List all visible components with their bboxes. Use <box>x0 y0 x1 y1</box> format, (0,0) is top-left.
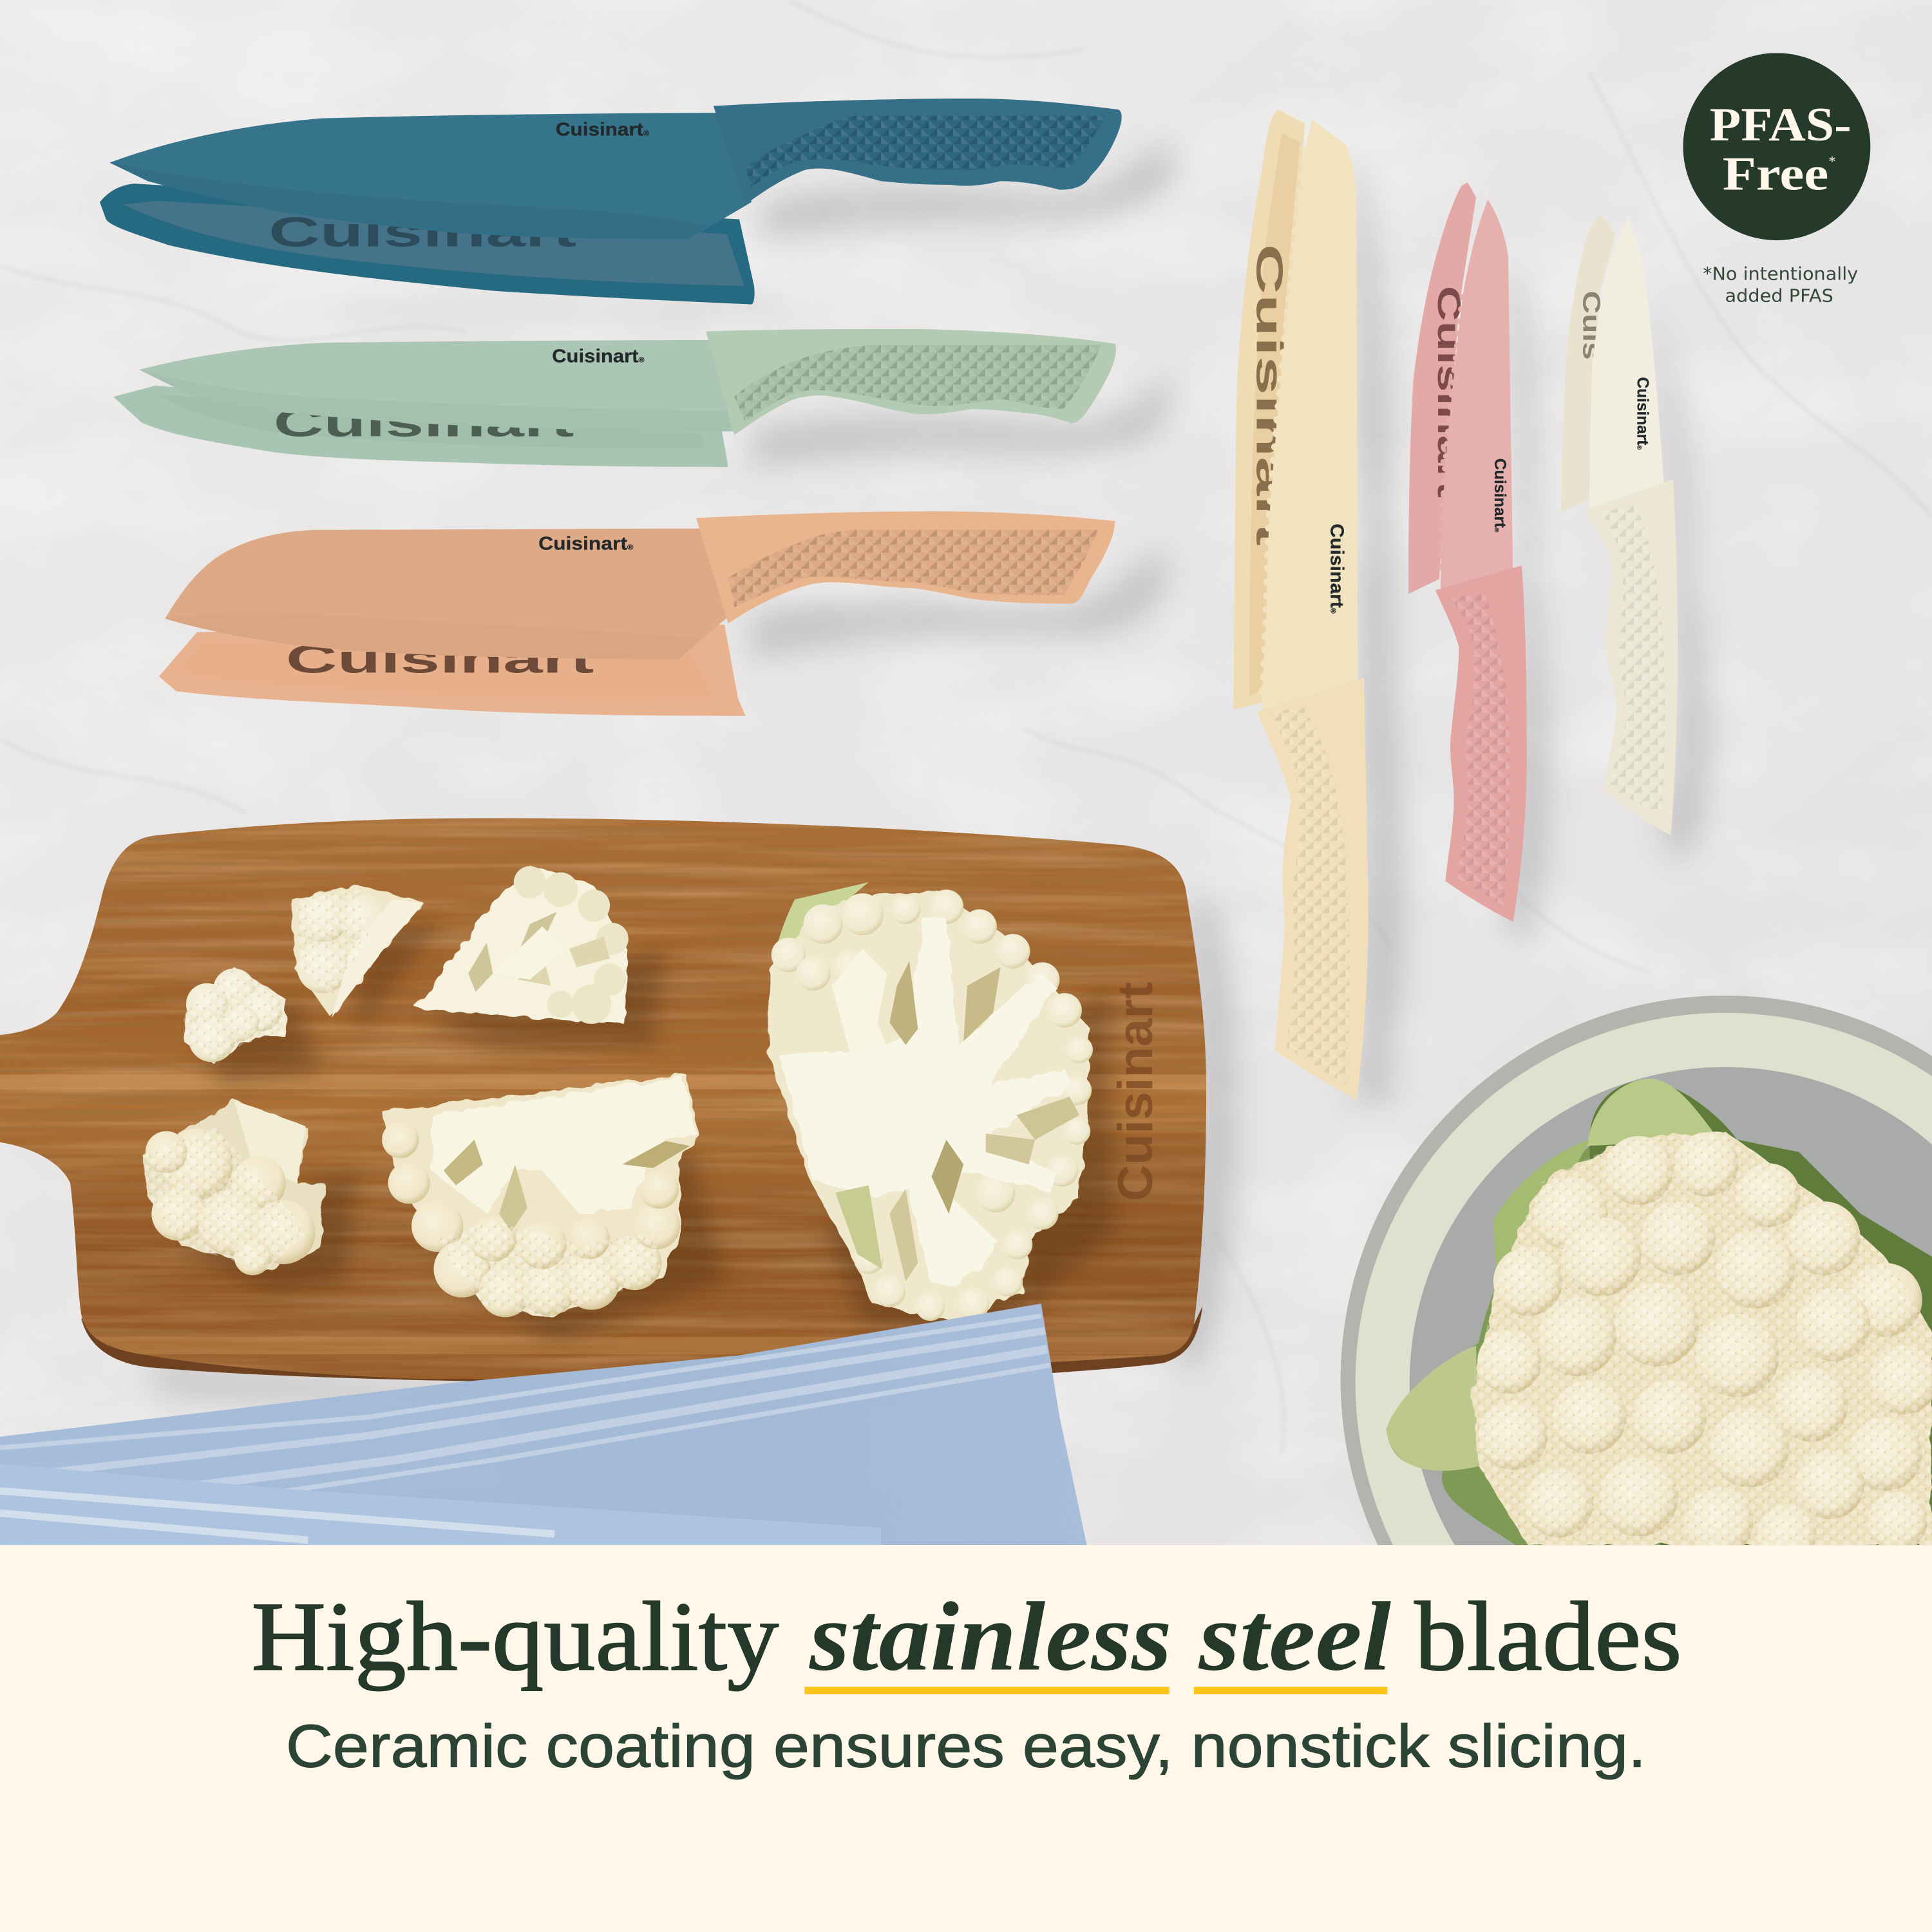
sheath: white: Cuis <box>1578 291 1605 360</box>
blade: sage <box>139 340 739 431</box>
footnote line 1: *No intentionally <box>1703 263 1858 284</box>
towel: blue striped linen <box>0 1294 1109 1553</box>
cauliflower: leaves <box>1386 1079 1932 1545</box>
cauliflower pieces on board <box>142 865 1093 1322</box>
underline: steel <box>1194 1687 1387 1694</box>
soft shadows under knives <box>123 142 1712 1405</box>
headline word: High-quality: High-quality <box>251 1582 779 1691</box>
blade: teal <box>109 113 752 239</box>
sheath: sage: Cuisinart <box>274 401 574 444</box>
handle: sage <box>706 329 1116 435</box>
cauliflower: head <box>1472 1131 1932 1564</box>
badge: PFAS-Free <box>1683 53 1870 240</box>
knife: cream bread knife with sheath <box>1233 109 1368 1101</box>
plate: glaze ring <box>1356 1013 1932 1752</box>
handle: pink <box>1435 565 1527 922</box>
sheath: pink: Cuisinart <box>1431 286 1467 498</box>
photo: kitchen flat-lay scene <box>0 0 1932 1546</box>
footnote line 2: added PFAS <box>1725 285 1833 307</box>
cutting board <box>0 813 1232 1405</box>
cauliflower: small floret <box>184 967 285 1065</box>
underline: stainless <box>804 1687 1170 1694</box>
knife: sage utility knife with sheath <box>113 329 1116 467</box>
sheath: white <box>1561 214 1615 513</box>
badge text: Free: Free <box>1723 148 1828 201</box>
towel fold: lower layer <box>0 1464 881 1545</box>
board face with wood grain <box>0 813 1232 1405</box>
headline word: stainless: stainless <box>809 1582 1172 1691</box>
cauliflower: wedge <box>292 886 424 1018</box>
sheath: cream <box>1233 109 1305 710</box>
handle: peach <box>696 511 1115 623</box>
sheath: peach <box>159 625 746 716</box>
sheath: teal <box>100 184 755 305</box>
cauliflower: large center slice <box>769 882 1093 1322</box>
blade: pink <box>1441 200 1513 596</box>
sheath: peach: Cuisinart <box>286 638 594 681</box>
knife: peach santoku knife with sheath <box>159 511 1115 716</box>
towel base cloth <box>0 1294 1109 1553</box>
footer: caption band <box>0 1545 1932 1932</box>
handle: cream <box>1257 677 1368 1101</box>
sheath: sage <box>113 386 728 467</box>
cauliflower: cut triangular floret <box>415 865 629 1024</box>
plate with whole cauliflower <box>1341 996 1932 1765</box>
handle: white <box>1584 479 1678 835</box>
blade: white <box>1589 217 1664 515</box>
logo: teal blade: Cuisinart ® <box>556 119 650 140</box>
logo: pink blade: Cuisinart ® <box>1491 459 1509 533</box>
cauliflower: halved floret <box>382 1074 699 1317</box>
plate: outer rim <box>1341 996 1932 1765</box>
handle: teal <box>714 99 1122 205</box>
footnote <box>1703 263 1858 307</box>
sheath: pink <box>1408 182 1476 594</box>
blade: cream <box>1262 120 1358 715</box>
cauliflower shadows on board <box>173 918 1115 1343</box>
logo: white blade: Cuisinart ® <box>1634 377 1652 450</box>
headline word: blades: blades <box>1414 1582 1682 1691</box>
headline word: steel: steel <box>1198 1582 1392 1691</box>
sheath: teal: Cuisinart <box>269 209 576 256</box>
badge text: asterisk: * <box>1828 153 1836 169</box>
plate: well <box>1410 1067 1932 1698</box>
logo: peach blade: Cuisinart ® <box>538 533 634 554</box>
marble countertop background <box>0 0 1932 1545</box>
subheading: Ceramic coating ensures easy, nonstick slicing. <box>286 1712 1646 1780</box>
sheath: cream: Cuisinart <box>1249 244 1290 546</box>
cauliflower: lower left floret <box>142 1101 324 1275</box>
engraved board logo: Cuisinart <box>1108 982 1163 1201</box>
badge text: PFAS-: PFAS- <box>1710 99 1852 151</box>
knife: teal chef knife with sheath <box>100 99 1122 305</box>
logo: sage blade: Cuisinart ® <box>552 346 645 366</box>
knife: pink utility knife with sheath <box>1408 182 1527 922</box>
blade: peach <box>165 529 733 659</box>
headline <box>251 1582 1682 1691</box>
knife: white paring knife with sheath <box>1561 214 1678 835</box>
logo: cream blade: Cuisinart ® <box>1326 524 1347 614</box>
board underside edge <box>81 1306 1202 1383</box>
